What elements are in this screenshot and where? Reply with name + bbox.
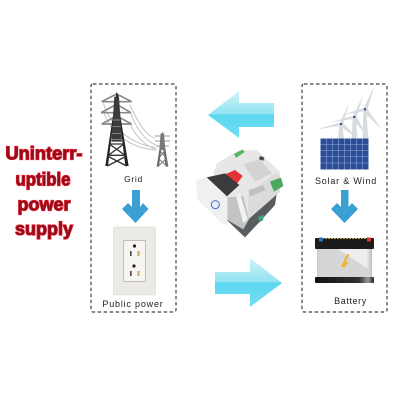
label: Grid: Grid (124, 174, 143, 184)
device small window (259, 156, 264, 161)
device left plate (196, 177, 227, 225)
device clip (258, 215, 263, 222)
arrow: left pointing cyan arrow (208, 91, 274, 138)
heading: Uninterruptible power supply: supply (15, 219, 73, 239)
heading: Uninterruptible power supply: power (17, 194, 71, 214)
device rating strip (248, 185, 265, 197)
heading: Uninterruptible power supply: Uninterr- (6, 144, 83, 164)
panel: solar, wind and battery (302, 84, 387, 312)
arrow: right pointing cyan arrow (215, 258, 282, 307)
icon: battery (315, 238, 374, 283)
heading: Uninterruptible power supply: uptible (16, 170, 70, 190)
device top body (213, 150, 280, 219)
device red handle (225, 170, 243, 185)
heading: Uninterruptible power supply (6, 144, 83, 239)
device base (227, 190, 277, 237)
device green terminal right (270, 178, 283, 192)
icon: blue down arrow (331, 190, 358, 223)
device logo (211, 201, 219, 209)
panel: grid and public power (91, 84, 176, 312)
icon: transmission towers (101, 92, 170, 167)
device terminal divider (236, 193, 248, 223)
label: Public power: Public power (102, 299, 164, 309)
device dark cover (207, 173, 239, 197)
icon: solar panel (320, 138, 368, 170)
icon: blue down arrow (122, 190, 148, 223)
icon: wall outlet (114, 227, 156, 295)
label: Battery: Battery (334, 296, 367, 306)
device: automatic transfer switch (196, 149, 283, 237)
device green terminal top (234, 149, 245, 158)
label: Solar & Wind: Solar & Wind (315, 176, 377, 186)
device right face (248, 173, 280, 219)
device label (243, 159, 272, 182)
device terminals (227, 196, 249, 229)
icon: wind turbines (317, 86, 382, 139)
